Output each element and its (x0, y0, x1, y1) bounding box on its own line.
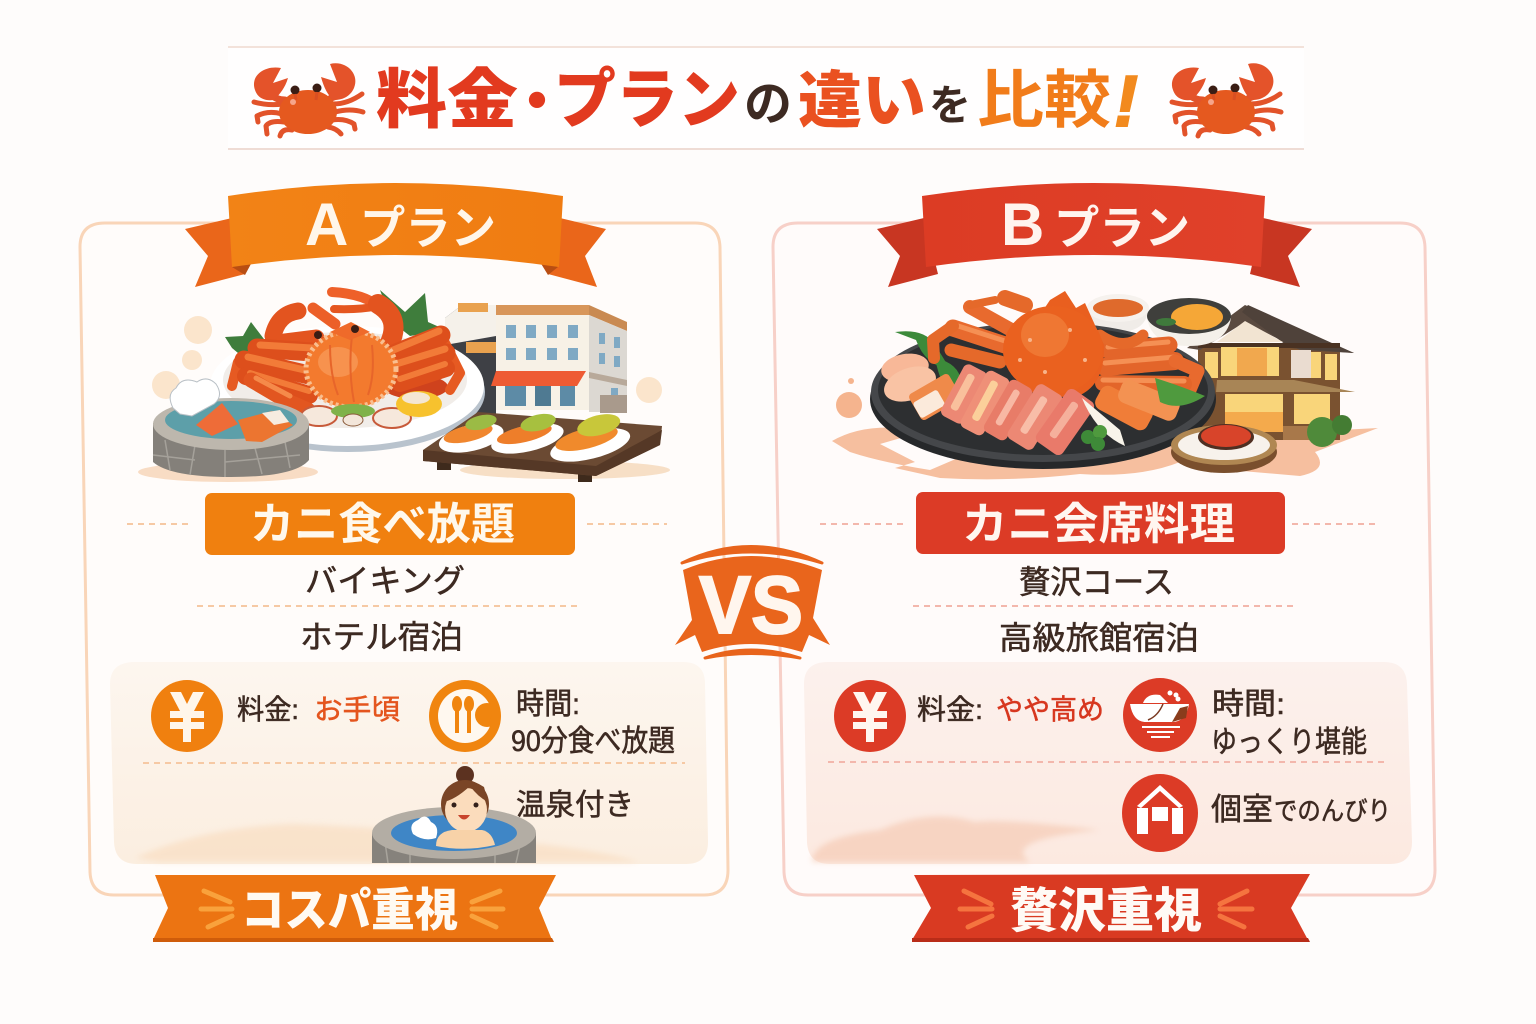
VS badge: VS (699, 560, 803, 651)
text: price (237, 694, 400, 725)
text: private room (1211, 792, 1391, 827)
text: time: 時間: (516, 688, 580, 721)
badge: crab kaiseki: カニ会席料理 (962, 488, 1235, 552)
dashed dividers (820, 524, 1378, 606)
icon: yen (151, 680, 223, 752)
text: ryokan stay: 高級旅館宿泊 (999, 613, 1199, 659)
icon: left crab (254, 63, 363, 136)
title text: 比較 (977, 66, 1111, 136)
text: onsen included: 温泉付き (516, 780, 634, 824)
text: time: 90分食べ放題 (511, 725, 675, 758)
illustration: crab buffet, hotel and onsen (138, 290, 670, 482)
icon: private room house (1122, 774, 1198, 852)
text: hotel stay: ホテル宿泊 (300, 612, 463, 658)
title text: 料金 (376, 63, 518, 136)
title text (376, 62, 1138, 142)
panel: B plan (675, 183, 1435, 942)
text: price: やや高め (996, 694, 1104, 725)
ribbon: A plan heading: A (305, 191, 348, 258)
icon: bowl (1123, 678, 1197, 752)
ribbon: luxury focus: 贅沢重視 (1010, 871, 1202, 941)
title text: を (929, 82, 971, 129)
ribbon: A plan heading: プラン (360, 192, 496, 258)
illustration: kaiseki platter and ryokan (832, 291, 1378, 479)
text: time: ゆっくり堪能 (1211, 726, 1367, 759)
text: price (917, 694, 1104, 725)
ribbon: B plan heading: プラン (1054, 192, 1190, 258)
dark plate with crab (870, 291, 1216, 469)
icon: yen (834, 680, 906, 752)
icon: cutlery clock (429, 680, 501, 752)
panel: A plan (80, 183, 728, 942)
text: private room: でのんびり (1274, 796, 1391, 826)
info panel: B details (804, 662, 1412, 864)
VS badge (675, 546, 830, 658)
text: luxury course: 贅沢コース (1019, 557, 1174, 603)
title text: ・ (508, 70, 566, 135)
ribbon: A plan heading (185, 183, 606, 287)
plate with crab (210, 290, 485, 452)
stone onsen tub (138, 379, 318, 482)
crab cuts (879, 350, 1205, 457)
dashed dividers (127, 524, 667, 606)
badge: crab kaiseki (916, 488, 1285, 554)
text: price: 料金: (237, 694, 299, 725)
ribbon: value focus: コスパ重視 (241, 874, 458, 940)
title band (228, 47, 1304, 149)
title text: 違い (798, 67, 926, 136)
info panel: A details (110, 662, 708, 864)
badge: crab buffet (205, 488, 575, 555)
text: time (1211, 688, 1367, 759)
title text: の (744, 78, 792, 131)
building: ryokan (1187, 305, 1355, 447)
icon: right crab (1172, 63, 1281, 136)
text: buffet style: バイキング (305, 556, 465, 602)
wooden sauce bowl (1171, 424, 1277, 473)
sauce and sashimi bowls (1087, 294, 1231, 346)
building: hotel (445, 303, 627, 415)
title text: ! (1114, 62, 1138, 142)
icon: woman in onsen (372, 766, 536, 863)
ribbon: B plan heading (877, 183, 1312, 287)
text: time: 時間: (1212, 688, 1285, 721)
badge: crab buffet: カニ食べ放題 (250, 488, 515, 552)
text: price: 料金: (917, 694, 983, 725)
title text: プラン (554, 63, 740, 136)
text: price: お手頃 (314, 694, 400, 725)
ribbon: luxury focus (912, 871, 1310, 942)
text: time (511, 688, 675, 758)
sushi tray (423, 409, 670, 482)
ribbon: value focus (153, 874, 556, 942)
text: private room: 個室 (1211, 792, 1273, 827)
ribbon: B plan heading: B (1001, 191, 1044, 258)
